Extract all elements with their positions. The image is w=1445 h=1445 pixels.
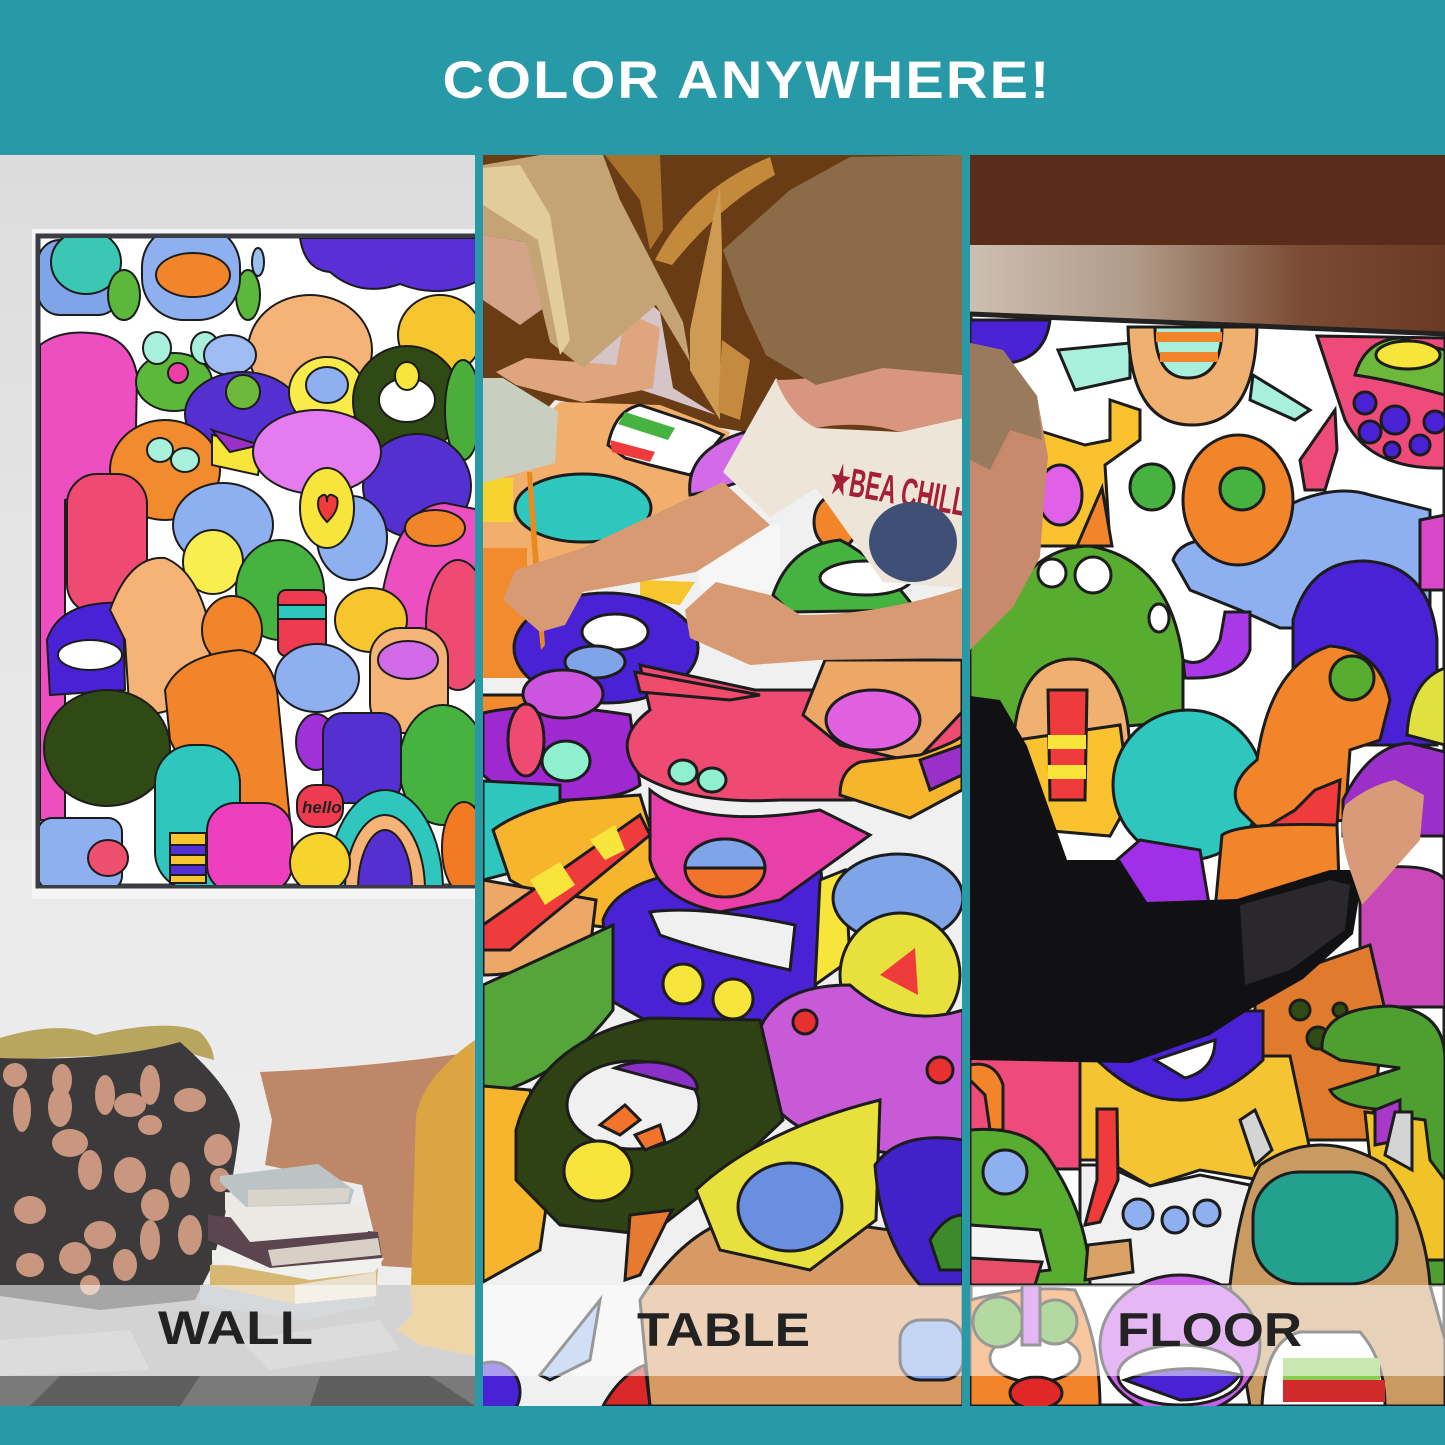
crayon box xyxy=(483,378,558,483)
pillow xyxy=(260,1054,460,1270)
photo: girl xyxy=(483,155,716,415)
wooden chairs background xyxy=(483,155,962,455)
shirt print: ★BEA CHILL xyxy=(826,458,970,525)
title: COLOR ANYWHERE! xyxy=(442,51,1052,110)
label strip: wall: WALL xyxy=(158,1301,313,1354)
label strip: floor: FLOOR xyxy=(1117,1303,1302,1356)
armchair xyxy=(397,1040,475,1356)
hello: hello xyxy=(302,798,342,817)
coloring sheet xyxy=(970,314,1445,1415)
book stack xyxy=(200,1164,384,1320)
coloring sheet on table xyxy=(464,400,963,1422)
label strip: table: TABLE xyxy=(637,1303,810,1356)
pencil xyxy=(527,472,545,650)
photo: man xyxy=(970,343,1424,1063)
basket xyxy=(0,1026,240,1310)
panel: wall xyxy=(0,155,490,1406)
panel: table xyxy=(464,155,970,1422)
label strip: table xyxy=(483,1285,962,1376)
poster on wall xyxy=(32,225,490,899)
rug xyxy=(0,1285,475,1406)
photo: boy xyxy=(503,155,970,665)
panel: floor xyxy=(970,155,1445,1415)
label strip: wall xyxy=(0,1285,475,1376)
label strip: floor xyxy=(970,1285,1445,1376)
wood floor xyxy=(970,155,1445,335)
